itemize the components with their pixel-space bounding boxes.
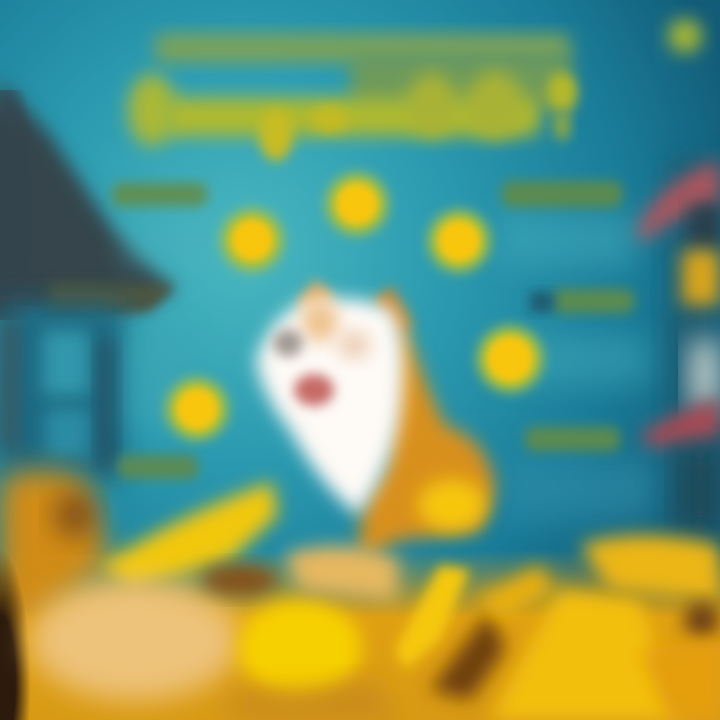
title: blurred heading — [128, 34, 577, 161]
dog mouth — [294, 374, 334, 406]
icon: coin upper left — [221, 209, 283, 271]
dog white fur — [256, 299, 404, 515]
panel: right building — [632, 160, 720, 530]
icon: corner coin — [668, 19, 702, 53]
panel: left building — [0, 80, 190, 480]
icon: coin lower left — [166, 378, 228, 440]
dog eye patch — [273, 329, 303, 357]
dog body — [359, 295, 495, 560]
coin held by dog — [418, 479, 486, 531]
dog ears — [298, 280, 335, 325]
dog forehead — [302, 302, 338, 342]
illustration: coin pile — [0, 470, 720, 720]
icon: coin top centre — [326, 173, 388, 235]
icon: coin upper right — [428, 210, 490, 272]
text blocks: left column — [112, 183, 215, 479]
illustration: dog — [256, 280, 495, 560]
text blocks: right column — [500, 181, 655, 520]
icon: coin right — [477, 326, 543, 392]
